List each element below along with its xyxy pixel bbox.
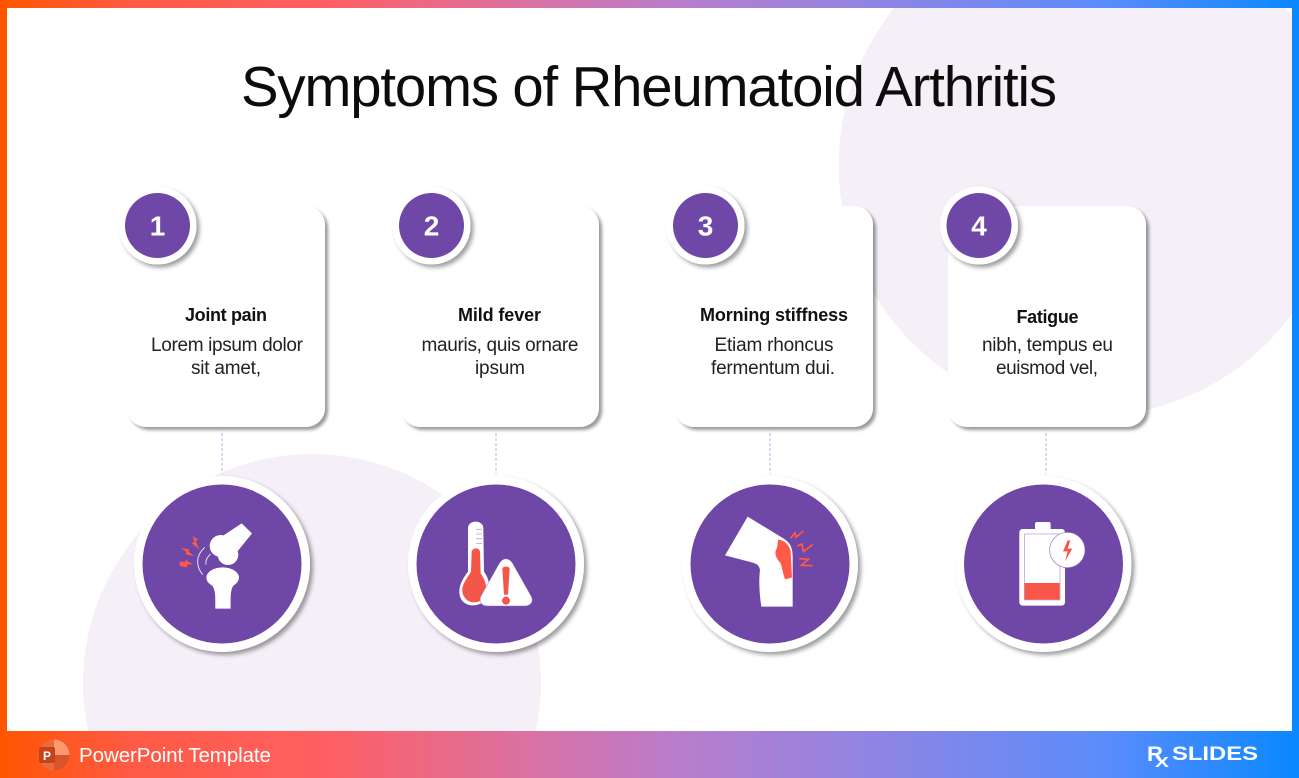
footer: PowerPoint Template label: PowerPoint Template: [79, 744, 271, 767]
number badge 4: [940, 186, 1018, 264]
panel: morning stiffness: [666, 186, 873, 652]
text: joint pain description: sit amet,: [191, 358, 261, 379]
panel: joint pain: [118, 186, 325, 652]
footer: RxSlides logo: SLIDES: [1172, 744, 1258, 765]
title: Symptoms of Rheumatoid Arthritis: [241, 55, 1057, 118]
text: joint pain description: Lorem ipsum dolor: [151, 335, 304, 356]
footer: RxSlides logo: [1147, 743, 1258, 771]
card 1: [127, 206, 325, 427]
card 3: [675, 206, 873, 427]
card 4: [948, 206, 1146, 427]
footer: PowerPoint icon: [38, 739, 70, 770]
number badge 4: 4: [971, 210, 987, 242]
heading: mild fever: Mild fever: [458, 305, 541, 325]
connector 3: [769, 428, 771, 474]
footer: RxSlides logo: X: [1155, 754, 1169, 771]
heading: joint pain: Joint pain: [185, 305, 267, 325]
footer: PowerPoint icon: P: [43, 749, 51, 763]
icon: low battery: [956, 476, 1132, 652]
icon: knee: [682, 476, 858, 652]
number badge 1: [118, 186, 196, 264]
number badge 2: [392, 186, 470, 264]
text: morning stiffness description: fermentum dui.: [711, 358, 835, 379]
number badge 3: [666, 186, 744, 264]
text: mild fever description: ipsum: [475, 358, 525, 379]
heading: morning stiffness: Morning stiffness: [700, 305, 848, 325]
connector 4: [1045, 428, 1047, 474]
footer: RxSlides logo: R: [1147, 743, 1163, 766]
panel: mild fever: [392, 186, 599, 652]
number badge 2: 2: [424, 210, 439, 242]
text: morning stiffness description: Etiam rhoncus: [714, 335, 834, 356]
icon: thermometer with warning: [408, 476, 584, 652]
text: mild fever description: mauris, quis ornare: [422, 335, 578, 356]
card 2: [401, 206, 599, 427]
icon: joint: [134, 476, 310, 652]
number badge 3: 3: [698, 210, 713, 242]
text: fatigue description: nibh, tempus eu: [982, 335, 1113, 356]
connector 1: [221, 428, 223, 474]
text: fatigue description: euismod vel,: [996, 358, 1098, 379]
connector 2: [495, 428, 497, 474]
heading: fatigue: Fatigue: [1016, 307, 1078, 327]
panel: fatigue: [940, 186, 1146, 652]
number badge 1: 1: [150, 210, 165, 242]
